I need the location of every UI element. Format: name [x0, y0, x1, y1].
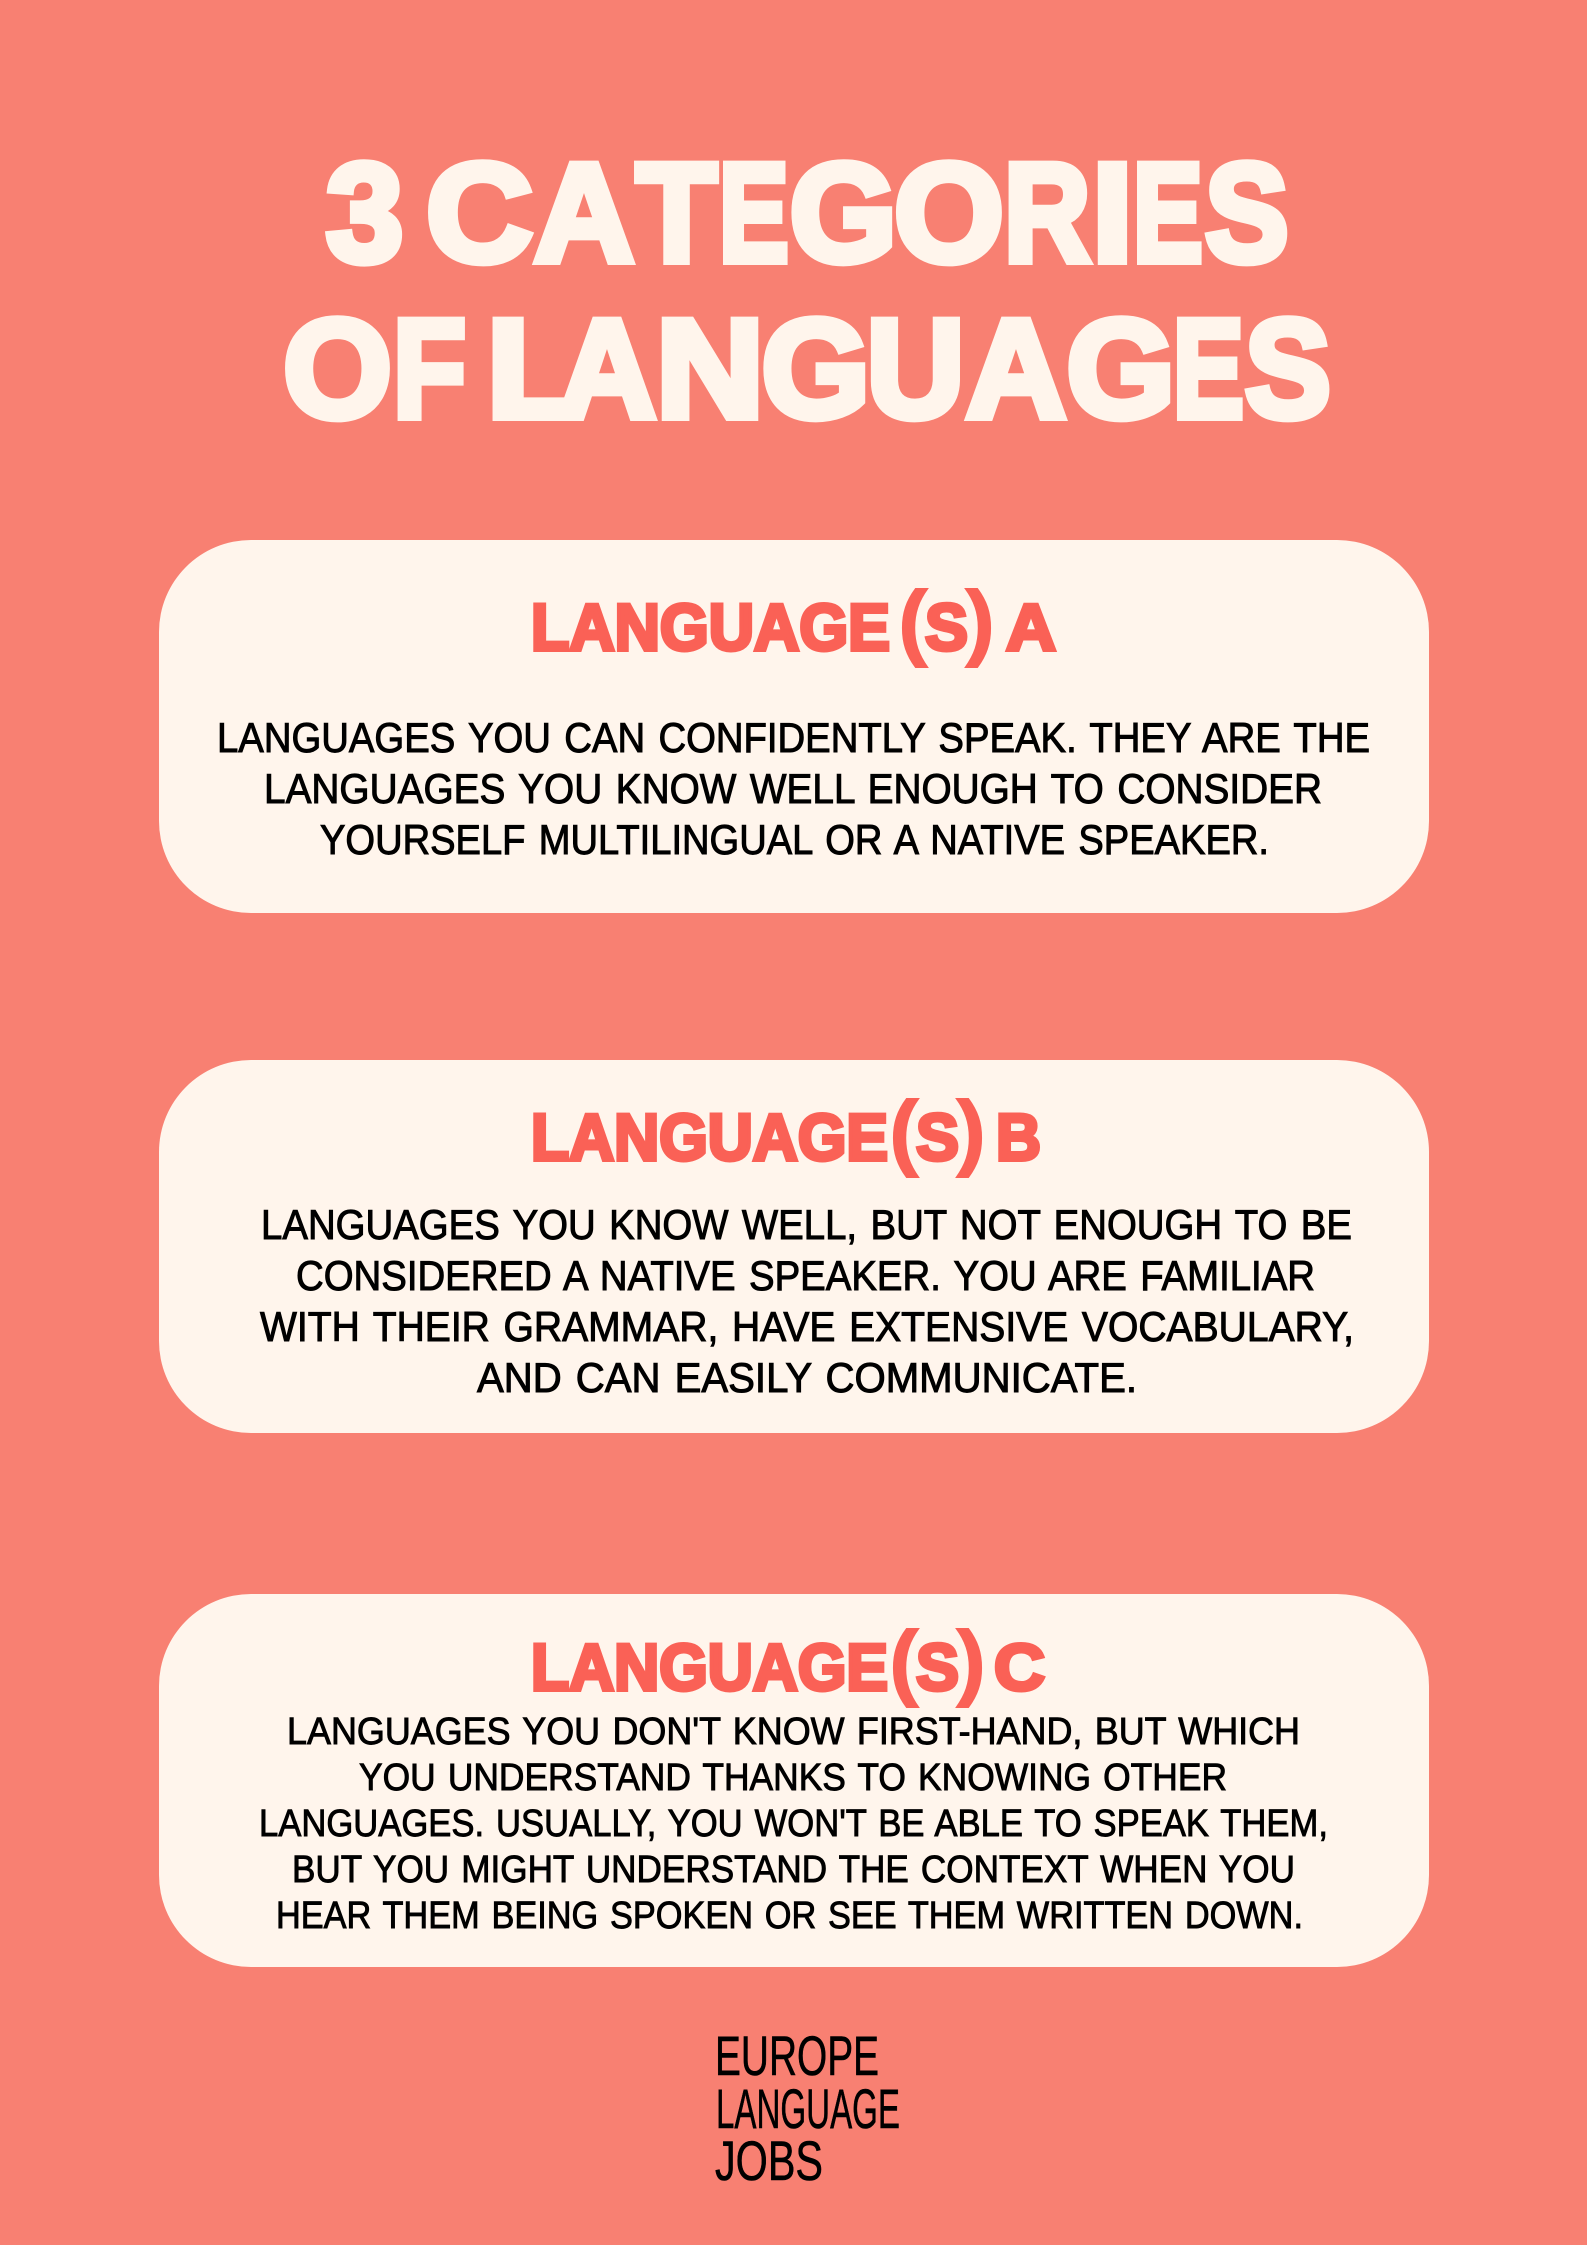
- title: T: [636, 134, 717, 291]
- logo: Europe Language Jobs: JOBS: [715, 2129, 823, 2192]
- title: U: [867, 290, 964, 447]
- title: N: [656, 290, 764, 447]
- heading: language(s) C: C: [994, 1630, 1045, 1704]
- title: F: [393, 290, 466, 447]
- title: G: [762, 290, 870, 447]
- body text: language(s) C: LANGUAGES YOU DON'T KNOW FIRST-HAND, BUT WHICH: [287, 1711, 1300, 1753]
- title: [283, 134, 1331, 447]
- title: E: [1173, 290, 1244, 447]
- body text: language(s) B: LANGUAGES YOU KNOW WELL, BUT NOT ENOUGH TO BE: [261, 1201, 1352, 1248]
- title: A: [966, 290, 1066, 447]
- body text: language(s) B: AND CAN EASILY COMMUNICATE.: [477, 1354, 1137, 1401]
- heading: language(s) A: (: [898, 574, 928, 668]
- body text: language(s) C: LANGUAGES. USUALLY, YOU WON'T BE ABLE TO SPEAK THEM,: [259, 1803, 1328, 1845]
- title: G: [1067, 290, 1175, 447]
- title: S: [1205, 134, 1289, 291]
- logo: Europe Language Jobs: LANGUAGE: [716, 2077, 900, 2140]
- heading: language(s) B: LANGUAGE: [531, 1100, 888, 1174]
- body text: language(s) C: YOU UNDERSTAND THANKS TO KNOWING OTHER: [359, 1757, 1227, 1799]
- body text: language(s) B: CONSIDERED A NATIVE SPEAKER. YOU ARE FAMILIAR: [296, 1252, 1315, 1299]
- heading: language(s) C: LANGUAGE: [531, 1630, 888, 1704]
- logo: Europe Language Jobs: [715, 2024, 900, 2192]
- heading: language(s) B: ): [956, 1084, 986, 1178]
- title: L: [487, 290, 581, 447]
- body text: language(s) A: [217, 714, 1370, 863]
- title: G: [790, 134, 897, 291]
- body text: language(s) B: [260, 1201, 1354, 1401]
- heading: language(s) A: S: [925, 590, 968, 664]
- heading: language(s) C: [531, 1614, 1045, 1708]
- title: 3: [326, 134, 403, 291]
- body text: language(s) A: YOURSELF MULTILINGUAL OR A NATIVE SPEAKER.: [320, 816, 1269, 863]
- body text: language(s) C: BUT YOU MIGHT UNDERSTAND THE CONTEXT WHEN YOU: [292, 1849, 1295, 1891]
- panel: language(s) A: [159, 540, 1429, 913]
- panel: language(s) C: [159, 1594, 1429, 1967]
- title: O: [894, 134, 1004, 291]
- panel: language(s) B: [159, 1060, 1429, 1433]
- heading: language(s) A: A: [1006, 590, 1056, 664]
- title: A: [534, 134, 634, 291]
- heading: language(s) A: ): [965, 574, 995, 668]
- body text: language(s) A: LANGUAGES YOU KNOW WELL ENOUGH TO CONSIDER: [264, 765, 1322, 812]
- heading: language(s) A: LANGUAGE: [531, 590, 890, 664]
- title: I: [1092, 134, 1133, 291]
- heading: language(s) B: S: [916, 1100, 959, 1174]
- heading: language(s) C: ): [956, 1614, 986, 1708]
- title: C: [426, 134, 533, 291]
- title: R: [1004, 134, 1090, 291]
- heading: language(s) C: S: [916, 1630, 959, 1704]
- body text: language(s) C: HEAR THEM BEING SPOKEN OR SEE THEM WRITTEN DOWN.: [276, 1895, 1303, 1937]
- body text: language(s) C: [259, 1711, 1328, 1937]
- title: E: [719, 134, 789, 291]
- heading: language(s) A: [531, 574, 1056, 668]
- title: O: [283, 290, 392, 447]
- body text: language(s) B: WITH THEIR GRAMMAR, HAVE EXTENSIVE VOCABULARY,: [260, 1303, 1354, 1350]
- body text: language(s) A: LANGUAGES YOU CAN CONFIDENTLY SPEAK. THEY ARE THE: [217, 714, 1370, 761]
- heading: language(s) B: B: [996, 1100, 1041, 1174]
- heading: language(s) B: [531, 1084, 1041, 1178]
- logo: Europe Language Jobs: EUROPE: [715, 2024, 879, 2087]
- heading: language(s) B: (: [889, 1084, 919, 1178]
- title: E: [1133, 134, 1203, 291]
- heading: language(s) C: (: [889, 1614, 919, 1708]
- title: S: [1245, 290, 1331, 447]
- title: A: [558, 290, 656, 447]
